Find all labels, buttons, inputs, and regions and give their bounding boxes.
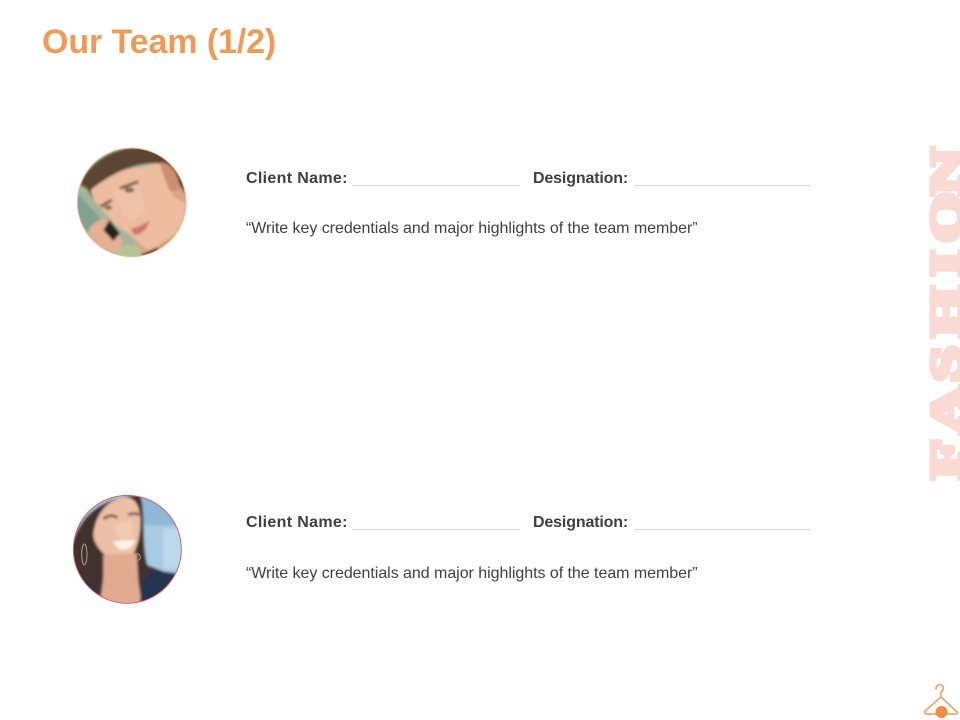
client name line 2 — [352, 529, 520, 530]
photo: man on phone — [76, 148, 186, 258]
client name label 2: Client Name: — [246, 514, 348, 531]
photo: smiling woman — [72, 494, 182, 604]
client name label 1: Client Name: — [246, 170, 348, 187]
quote 1: “Write key credentials and major highlights of the team member” — [246, 220, 698, 237]
icon: clothes hanger — [924, 684, 958, 718]
quote 2: “Write key credentials and major highlights of the team member” — [246, 565, 698, 582]
client name line 1 — [352, 185, 520, 186]
title: Our Team (1/2) — [42, 23, 276, 61]
designation line 2 — [634, 529, 811, 530]
designation label 1: Designation: — [533, 170, 628, 187]
designation line 1 — [634, 185, 811, 186]
designation label 2: Designation: — [533, 514, 628, 531]
